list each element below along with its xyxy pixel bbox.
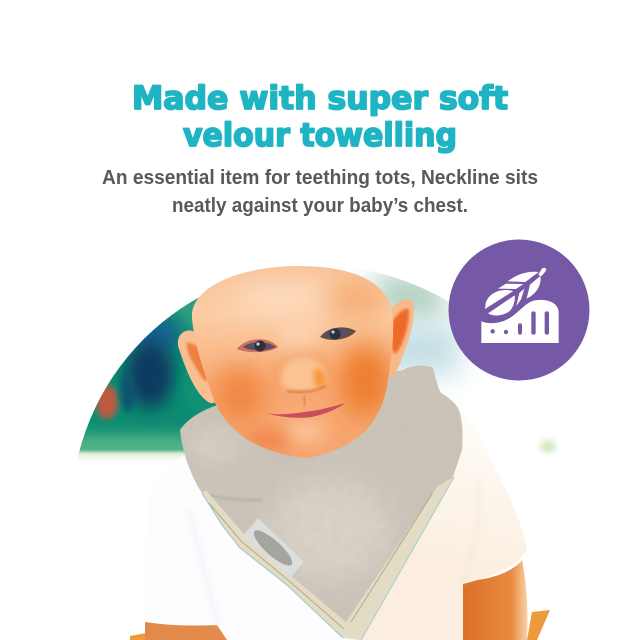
bib trim: [202, 477, 453, 640]
bib: [170, 360, 470, 640]
blurred photo background: [78, 270, 558, 460]
table edge: [130, 610, 550, 640]
ears: [178, 299, 414, 403]
badge: soft feather icon: [448, 240, 590, 380]
description text: [102, 167, 538, 217]
eyes: [237, 327, 356, 352]
baby arms: [145, 560, 527, 640]
title: [132, 79, 508, 154]
description text: neatly against your baby’s chest.: [172, 195, 468, 217]
woven label: [243, 518, 304, 578]
title: Made with super soft: [132, 79, 508, 117]
title: velour towelling: [183, 116, 457, 154]
icon: feather over soft-rise pile: [481, 268, 559, 343]
t-shirt: [143, 412, 527, 640]
description text: An essential item for teething tots, Neckline sits: [102, 167, 538, 189]
mouth: [265, 403, 345, 418]
nose: [272, 348, 332, 406]
baby face: [192, 266, 393, 458]
photo: baby wearing bib: [60, 260, 556, 640]
